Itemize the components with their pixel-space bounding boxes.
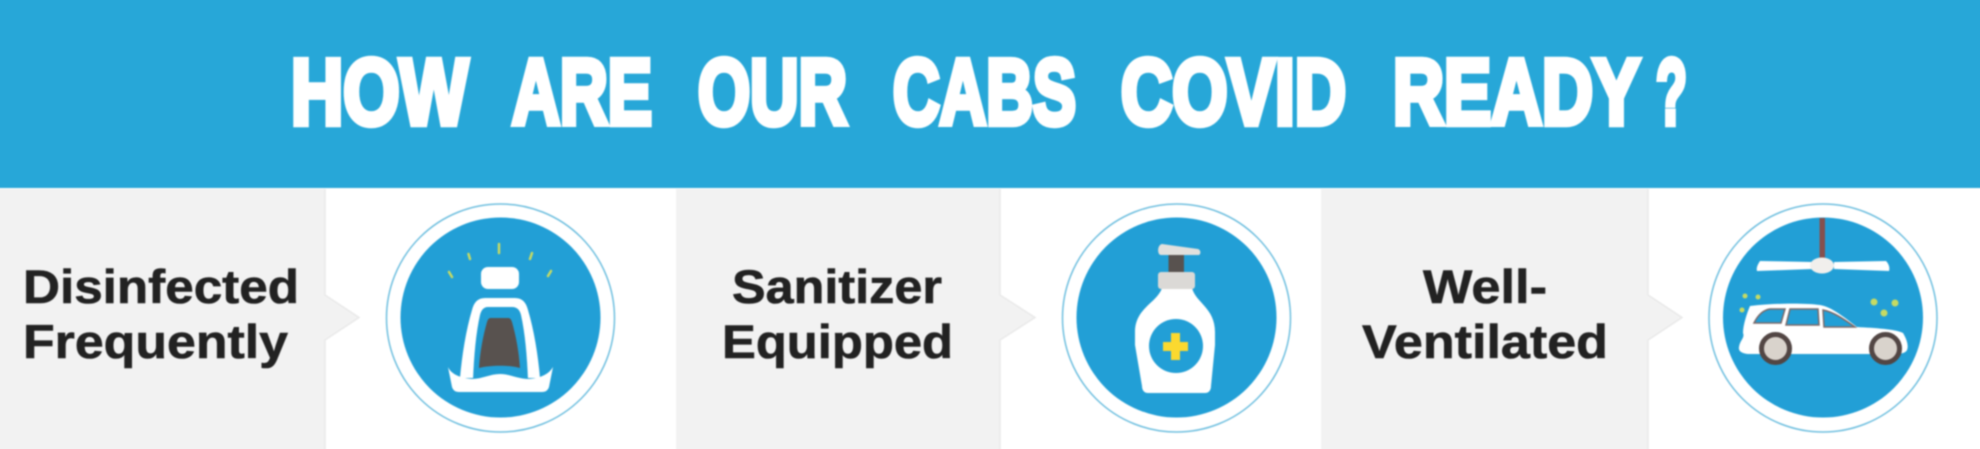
icon: sanitizer bottle bbox=[1062, 204, 1290, 432]
icon: car seat bbox=[386, 204, 614, 432]
bottle collar bbox=[1158, 272, 1195, 289]
fan hub bbox=[1810, 258, 1834, 274]
title: COVID bbox=[1121, 40, 1346, 144]
icon: car under fan bbox=[1709, 204, 1937, 432]
front wheel bbox=[1872, 334, 1900, 362]
pump stem bbox=[1168, 255, 1184, 273]
panel: well-ventilated bbox=[1321, 189, 1682, 449]
fan pole bbox=[1820, 218, 1825, 260]
cross bbox=[1163, 333, 1188, 360]
label circle bbox=[1149, 319, 1203, 373]
title: CABS bbox=[893, 40, 1076, 144]
text: disinfected frequently bbox=[23, 260, 299, 368]
title: OUR bbox=[698, 40, 847, 144]
fan blades bbox=[1757, 261, 1889, 271]
car windows bbox=[1754, 309, 1855, 327]
title: ? bbox=[1656, 40, 1687, 144]
text: well-ventilated: Well- bbox=[1423, 260, 1547, 313]
panel: disinfected frequently bbox=[0, 189, 359, 449]
headrest bbox=[481, 267, 519, 289]
rear wheel bbox=[1762, 334, 1790, 362]
sparkle rays bbox=[449, 244, 551, 277]
text: disinfected frequently: Frequently bbox=[23, 315, 288, 368]
title bbox=[291, 40, 1687, 144]
sparkles bbox=[1740, 294, 1898, 316]
text: disinfected frequently: Disinfected bbox=[23, 260, 299, 313]
bottle body bbox=[1135, 288, 1215, 393]
car body bbox=[1739, 304, 1908, 354]
seat back cushion bbox=[479, 318, 520, 368]
text: sanitizer equipped: Sanitizer bbox=[732, 260, 942, 313]
text: sanitizer equipped: Equipped bbox=[722, 315, 953, 368]
seat back bbox=[460, 298, 540, 378]
text: well-ventilated bbox=[1362, 260, 1608, 368]
seat base bbox=[448, 367, 553, 392]
pump head bbox=[1158, 244, 1200, 255]
text: sanitizer equipped bbox=[722, 260, 953, 368]
title: ARE bbox=[512, 40, 652, 144]
panel: sanitizer equipped bbox=[676, 189, 1035, 449]
title: HOW bbox=[291, 40, 468, 144]
header band bbox=[0, 0, 1980, 188]
title: READY bbox=[1393, 40, 1640, 144]
text: well-ventilated: Ventilated bbox=[1362, 315, 1608, 368]
